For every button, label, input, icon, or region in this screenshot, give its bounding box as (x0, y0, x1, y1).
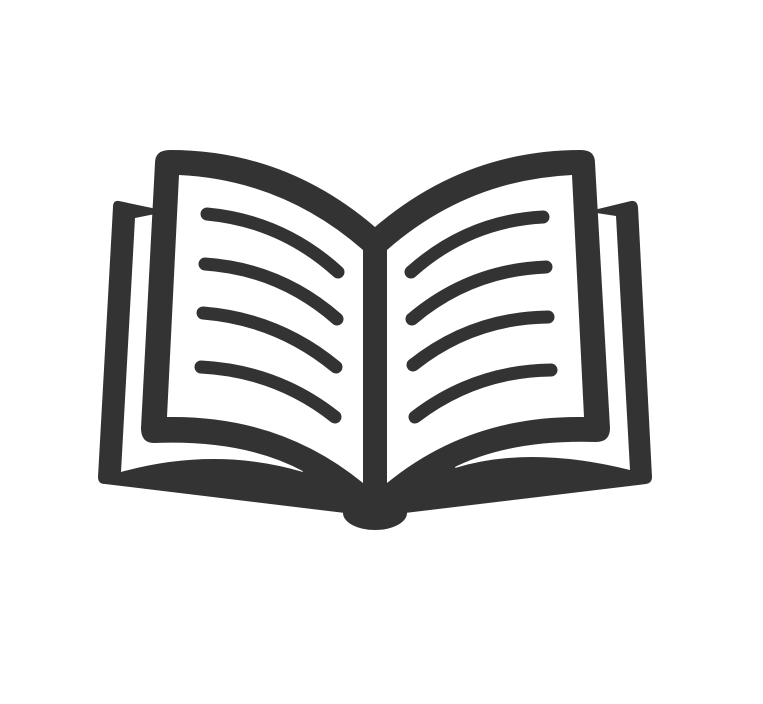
text lines: right page (411, 217, 551, 417)
text lines: left page (201, 214, 338, 417)
open pages (167, 175, 584, 483)
back cover silhouette (98, 201, 652, 530)
front cover (141, 150, 610, 520)
back pages (121, 212, 630, 472)
